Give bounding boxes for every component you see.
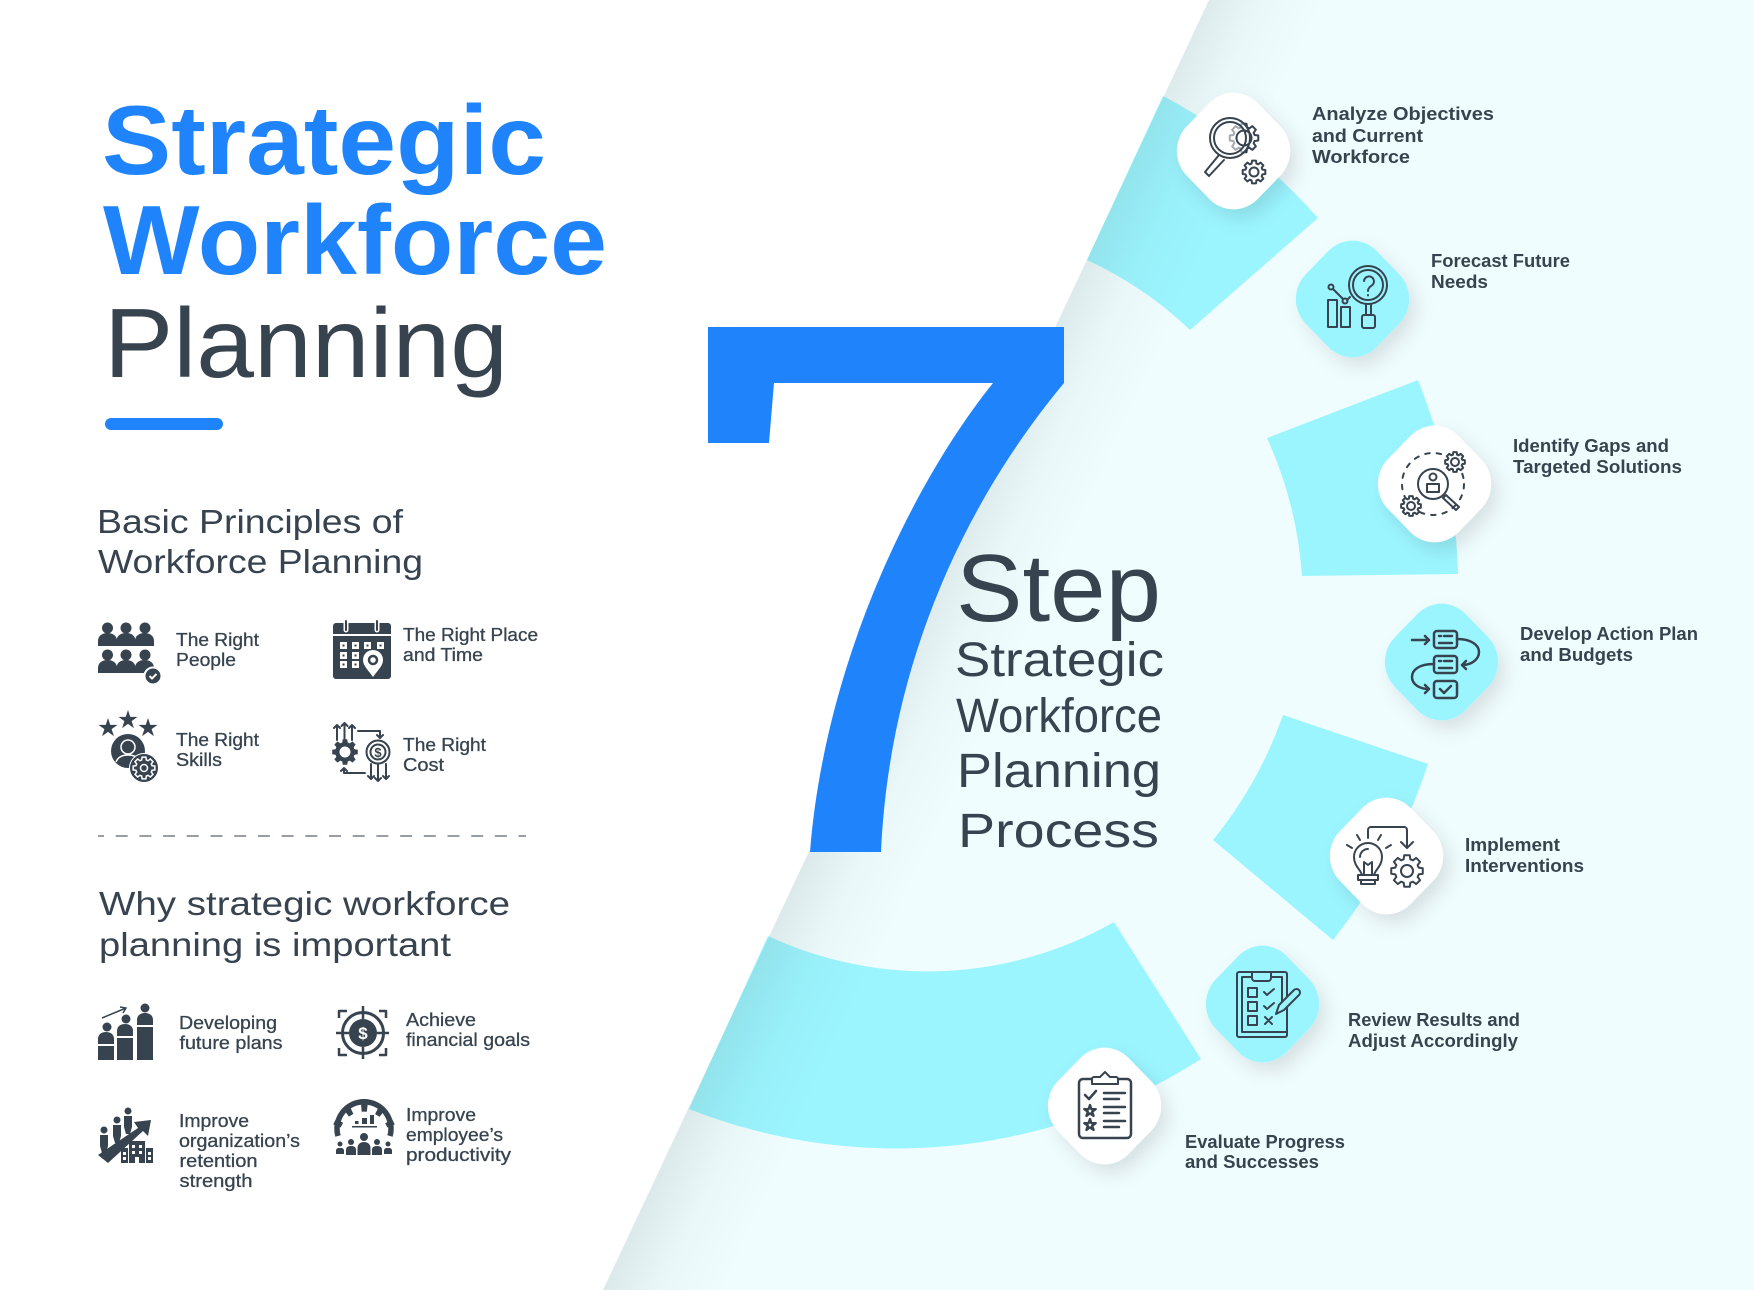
- center heading: step strategic workforce planning process: Strategic: [955, 634, 1164, 687]
- title: Strategic: [102, 85, 546, 195]
- label: the right skills: Skills: [176, 749, 222, 770]
- label: achieve financial goals: financial goals: [406, 1029, 530, 1050]
- label: improve organization's retention strength: [179, 1110, 300, 1191]
- label: achieve financial goals: Achieve: [406, 1009, 476, 1030]
- label: step 4: [1520, 623, 1698, 665]
- icon: bulb and gear: [1347, 827, 1423, 887]
- heading: basic principles: Basic Principles of: [97, 503, 404, 540]
- title: Workforce: [103, 185, 607, 295]
- icon: the right cost: $: [374, 745, 382, 760]
- step 7 card: [1034, 1033, 1175, 1179]
- heading: basic principles: Workforce Planning: [98, 543, 423, 580]
- label: step 4: and Budgets: [1520, 644, 1633, 665]
- segment: step 3: [1267, 380, 1458, 576]
- label: improve employee's productivity: Improve: [406, 1104, 476, 1125]
- label: step 3: Targeted Solutions: [1513, 456, 1682, 477]
- arc segments: [689, 96, 1458, 1148]
- label: the right place and time: The Right Place: [403, 624, 538, 645]
- label: the right skills: The Right: [176, 729, 259, 750]
- label: step 2: Forecast Future: [1431, 250, 1570, 271]
- label: the right people: [176, 629, 259, 670]
- label: improve employee's productivity: [406, 1104, 512, 1165]
- label: step 7: Evaluate Progress: [1185, 1131, 1345, 1152]
- pale background panel: [603, 0, 1754, 1290]
- label: the right cost: The Right: [403, 734, 486, 755]
- title: Planning: [104, 288, 508, 398]
- heading: why strategic workforce planning is important: planning is important: [99, 926, 451, 963]
- segment: step 1: [1087, 96, 1318, 330]
- label: step 2: Needs: [1431, 271, 1488, 292]
- icon: improve employee productivity: [336, 1102, 392, 1155]
- label: step 5: Implement: [1465, 834, 1560, 855]
- icon: improve retention: [98, 1108, 153, 1163]
- center heading: step strategic workforce planning process: Process: [958, 805, 1159, 858]
- label: improve employee's productivity: productivity: [406, 1144, 512, 1165]
- label: step 3: Identify Gaps and: [1513, 435, 1669, 456]
- step 4 card: [1371, 589, 1512, 735]
- label: step 5: Interventions: [1465, 855, 1584, 876]
- icon: the right cost: [332, 723, 390, 781]
- label: the right place and time: [403, 624, 538, 665]
- icon: achieve financial goals: [336, 1006, 389, 1059]
- title underline: [105, 418, 223, 430]
- divider: [98, 835, 526, 837]
- title: [102, 85, 607, 398]
- center heading: step strategic workforce planning process: [955, 535, 1164, 858]
- step 3 card: [1364, 411, 1505, 557]
- icon: the right people: [98, 622, 162, 684]
- label: developing future plans: [179, 1012, 282, 1053]
- big numeral 7: [708, 327, 1064, 852]
- step 6 card: [1192, 931, 1333, 1077]
- icon: evaluate clipboard: [1079, 1072, 1131, 1138]
- icon: developing future plans: [98, 1004, 153, 1060]
- label: improve organization's retention strength: strength: [180, 1170, 252, 1191]
- segment: step 5: [1213, 715, 1428, 940]
- label: step 1: [1312, 103, 1494, 167]
- diagonal edge shadow: [603, 0, 1754, 1290]
- label: step 2: [1431, 250, 1570, 292]
- label: step 1: Workforce: [1312, 146, 1410, 167]
- icon: magnifier with gears: [1205, 118, 1265, 183]
- step 2 card: [1282, 226, 1423, 372]
- heading: basic principles: [97, 503, 423, 580]
- label: the right place and time: and Time: [403, 644, 483, 665]
- label: step 7: and Successes: [1185, 1151, 1319, 1172]
- center heading: step strategic workforce planning process: Step: [956, 535, 1161, 642]
- center heading: step strategic workforce planning process: Workforce: [956, 690, 1162, 743]
- label: step 6: Adjust Accordingly: [1348, 1030, 1519, 1051]
- label: the right people: People: [176, 649, 236, 670]
- step 5 card: [1316, 783, 1457, 929]
- label: step 6: Review Results and: [1348, 1009, 1520, 1030]
- label: step 7: [1185, 1131, 1345, 1172]
- icon: the right place and time: [333, 621, 391, 679]
- step 1 card: [1163, 78, 1304, 224]
- label: improve organization's retention strength: retention: [180, 1150, 258, 1171]
- label: improve organization's retention strength: Improve: [179, 1110, 249, 1131]
- label: the right cost: Cost: [403, 754, 444, 775]
- label: step 3: [1513, 435, 1682, 477]
- label: improve organization's retention strength: organization’s: [179, 1130, 300, 1151]
- label: the right skills: [176, 729, 259, 770]
- icon: forecast magnifier and bars: [1328, 266, 1387, 328]
- icon: review clipboard: [1237, 972, 1300, 1037]
- label: step 1: Analyze Objectives: [1312, 103, 1494, 124]
- label: step 5: [1465, 834, 1584, 876]
- label: step 4: Develop Action Plan: [1520, 623, 1698, 644]
- segment: step 7: [689, 922, 1201, 1148]
- label: improve employee's productivity: employee’s: [406, 1124, 503, 1145]
- heading: why strategic workforce planning is important: [99, 885, 510, 963]
- label: achieve financial goals: [406, 1009, 530, 1050]
- label: the right people: The Right: [176, 629, 259, 650]
- label: step 1: and Current: [1312, 125, 1423, 146]
- label: developing future plans: future plans: [180, 1032, 282, 1053]
- heading: why strategic workforce planning is important: Why strategic workforce: [99, 885, 510, 922]
- label: step 6: [1348, 1009, 1520, 1051]
- icon: achieve financial goals: $: [358, 1024, 368, 1043]
- icon: identify gaps: [1401, 452, 1465, 516]
- label: developing future plans: Developing: [179, 1012, 277, 1033]
- icon: action plan flow: [1412, 631, 1479, 698]
- center heading: step strategic workforce planning process: Planning: [957, 745, 1161, 798]
- icon: the right skills: [98, 710, 158, 782]
- label: the right cost: [403, 734, 486, 775]
